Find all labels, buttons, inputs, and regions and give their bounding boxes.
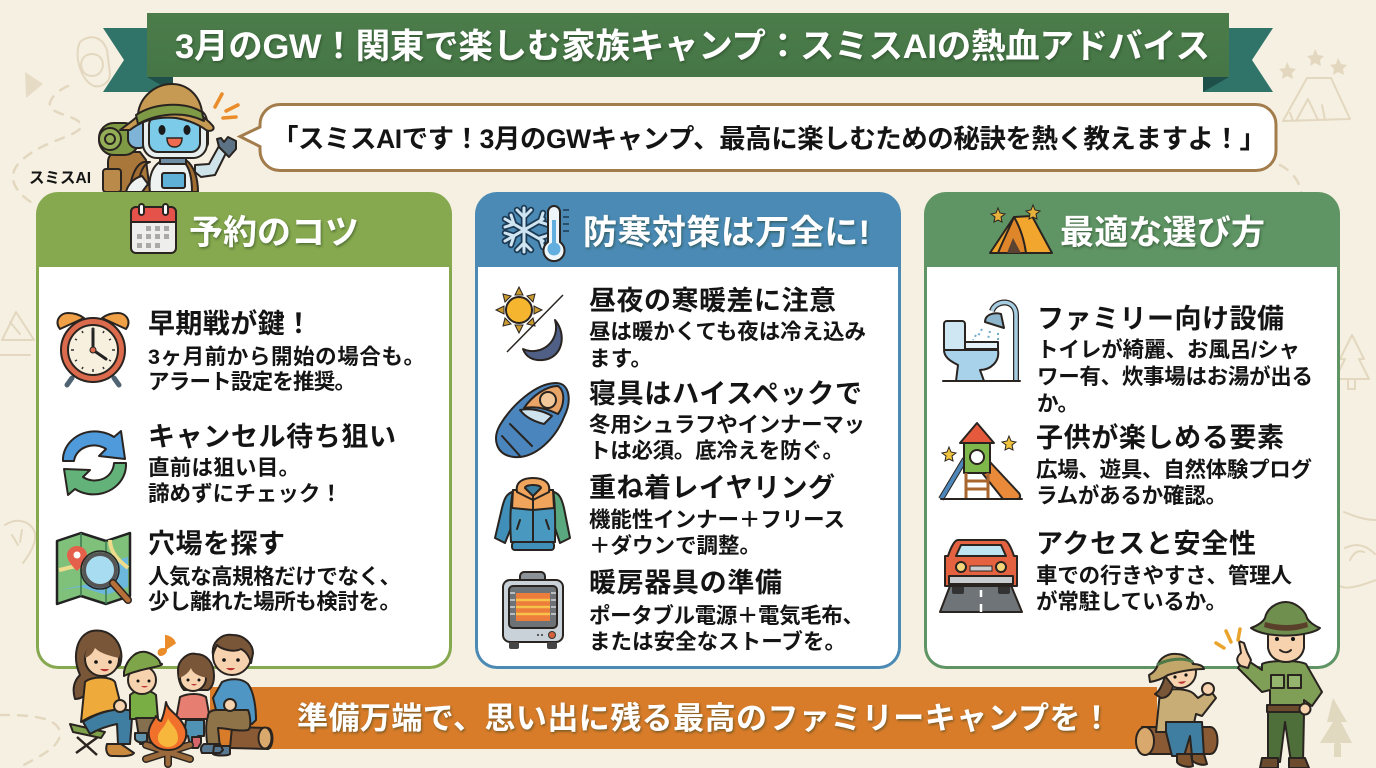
backpack [108,152,150,192]
log seat [230,727,272,749]
item 1 [1037,304,1313,416]
item 4: ポータブル電源＋電気毛布、 [589,603,864,628]
sparks [1216,629,1240,648]
log [1142,727,1218,754]
mother [74,630,121,699]
family around campfire [70,630,272,764]
item 2: 直前は狙い目。 [148,456,300,480]
title banner [103,13,1273,92]
item 3: 車での行きやすさ、管理人 [1036,564,1292,588]
item 3: 機能性インナー＋フリース [589,508,845,532]
item 4 [589,568,864,654]
icon: snowflake and thermometer [505,206,569,261]
item 2: 寝具はハイスペックで [589,379,862,409]
speech text: 「スミスAIです！3月のGWキャンプ、最高に楽しむための秘訣を熱く教えますよ！」 [272,124,1266,154]
icon: sun and moon [496,287,563,360]
icon: calendar [131,204,176,253]
item 2 [148,422,396,506]
icon: jacket [495,478,570,550]
item 3: 人気な高規格だけでなく、 [148,565,401,589]
stool [72,728,102,755]
item 3: が常駐しているか。 [1036,589,1227,614]
item 2 [589,379,865,463]
item 1: 昼夜の寒暖差に注意 [589,286,836,316]
panel: cold protection [475,192,901,669]
heading: 予約のコツ [189,214,359,252]
item 4: 暖房器具の準備 [589,568,782,598]
footer banner [210,687,1157,749]
father [213,679,256,724]
head [128,122,148,148]
item 2: キャンセル待ち狙い [148,422,396,452]
item 1: アラート設定を推奨。 [148,370,356,394]
icon: tent and stars [990,205,1052,253]
male ranger [1238,658,1322,714]
item 3: 重ね着レイヤリング [589,472,835,503]
rangers [1136,602,1322,768]
item 3: アクセスと安全性 [1036,529,1256,559]
icon: car on road [940,540,1022,612]
panel: how to choose [924,192,1340,669]
icon: heater [503,572,563,649]
female ranger [1156,689,1216,732]
item 3 [148,529,401,614]
item 2: ラムがあるか確認。 [1036,483,1227,508]
item 1 [148,308,425,394]
item 3 [589,472,845,558]
item 3: 少し離れた場所も検討を。 [148,590,401,614]
item 4: または安全なストーブを。 [589,629,846,654]
hat [120,106,214,131]
item 2 [1036,422,1312,508]
heading: 防寒対策は万全に! [583,214,870,252]
heading: 最適な選び方 [1060,214,1265,252]
item 3 [1036,529,1292,614]
girl [178,654,214,690]
ribbon left [103,28,173,92]
item 1: トイレが綺麗、お風呂/シャ [1037,337,1300,362]
item 1: 早期戦が鍵！ [148,308,312,339]
item 3: 穴場を探す [148,529,285,559]
item 1: ます。 [589,347,652,371]
footer text: 準備万端で、思い出に残る最高のファミリーキャンプを！ [297,701,1112,736]
item 2: トは必須。底冷えを防ぐ。 [589,439,844,463]
icon: alarm clock [58,313,128,385]
item 1: か。 [1037,392,1079,416]
icon: playground [941,423,1022,499]
item 2: 諦めずにチェック！ [148,482,342,506]
item 1: 3ヶ月前から開始の場合も。 [148,345,425,369]
body [150,160,196,192]
item 3: ＋ダウンで調整。 [589,533,761,558]
label: smith ai: スミスAI [29,170,91,187]
item 1: ファミリー向け設備 [1037,304,1284,334]
body [510,490,555,542]
ribbon right [1203,28,1273,92]
item 1 [589,286,866,371]
icon: toilet and shower [943,302,1020,381]
robot mascot [99,84,238,192]
campfire [146,745,190,764]
item 1: 昼は暖かくても夜は冷え込み [589,320,866,344]
icon: map [57,533,130,604]
item 2: 広場、遊具、自然体験プログ [1036,457,1312,482]
boy [130,690,158,719]
item 2: 子供が楽しめる要素 [1036,422,1284,453]
icon: sleeping bag [496,383,569,457]
item 2: 冬用シュラフやインナーマッ [589,413,865,437]
sleeves [495,492,517,543]
panel: reservation tips [36,192,452,669]
music note [159,636,175,655]
item 1: ワー有、炊事場はお湯が出る [1037,364,1313,389]
icon: refresh arrows [63,431,126,495]
speech bubble [240,104,1276,170]
title: 3月のGW！関東で楽しむ家族キャンプ：スミスAIの熱血アドバイス [175,28,1210,66]
